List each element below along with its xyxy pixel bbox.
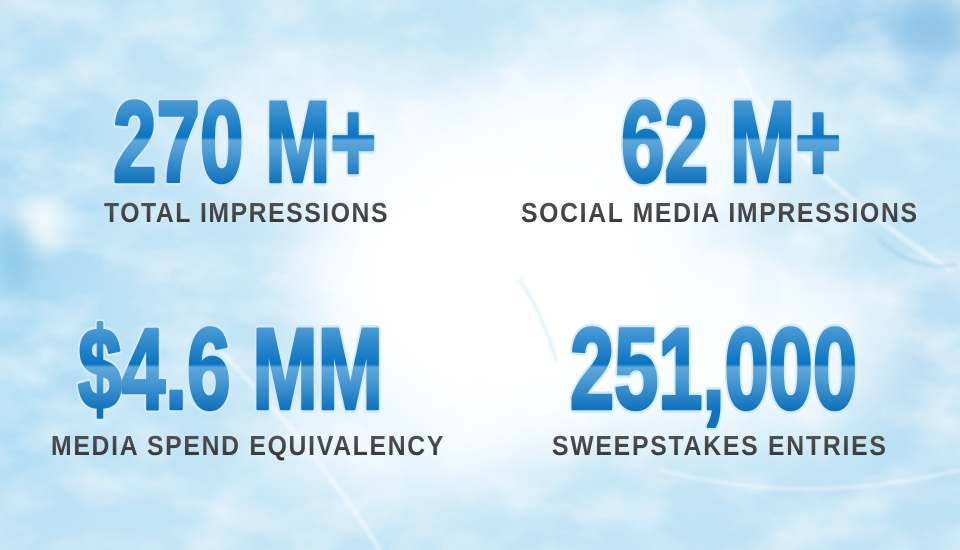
label: media spend equivalency: MEDIA SPEND EQUIVALENCY	[51, 430, 444, 461]
label: social media impressions: SOCIAL MEDIA IMPRESSIONS	[521, 197, 917, 228]
stat: media spend equivalency	[51, 306, 444, 461]
number: 270 M+: 270 M+	[113, 78, 376, 206]
label: sweepstakes entries: SWEEPSTAKES ENTRIES	[552, 430, 886, 461]
number: 62 M+: 62 M+	[621, 78, 841, 206]
number: $4.6 MM	[78, 306, 383, 434]
number: 62 M+: 62 M+	[621, 78, 841, 206]
number: 270 M+: 270 M+	[113, 78, 376, 206]
number: 62 M+	[621, 78, 841, 206]
number: $4.6 MM: $4.6 MM	[78, 306, 383, 434]
stat: total impressions	[104, 78, 388, 228]
label: total impressions: TOTAL IMPRESSIONS	[104, 197, 388, 228]
stat: social media impressions	[521, 78, 917, 228]
number: $4.6 MM: $4.6 MM	[78, 306, 383, 434]
stat: sweepstakes entries	[552, 306, 886, 461]
number: 270 M+	[113, 78, 376, 206]
